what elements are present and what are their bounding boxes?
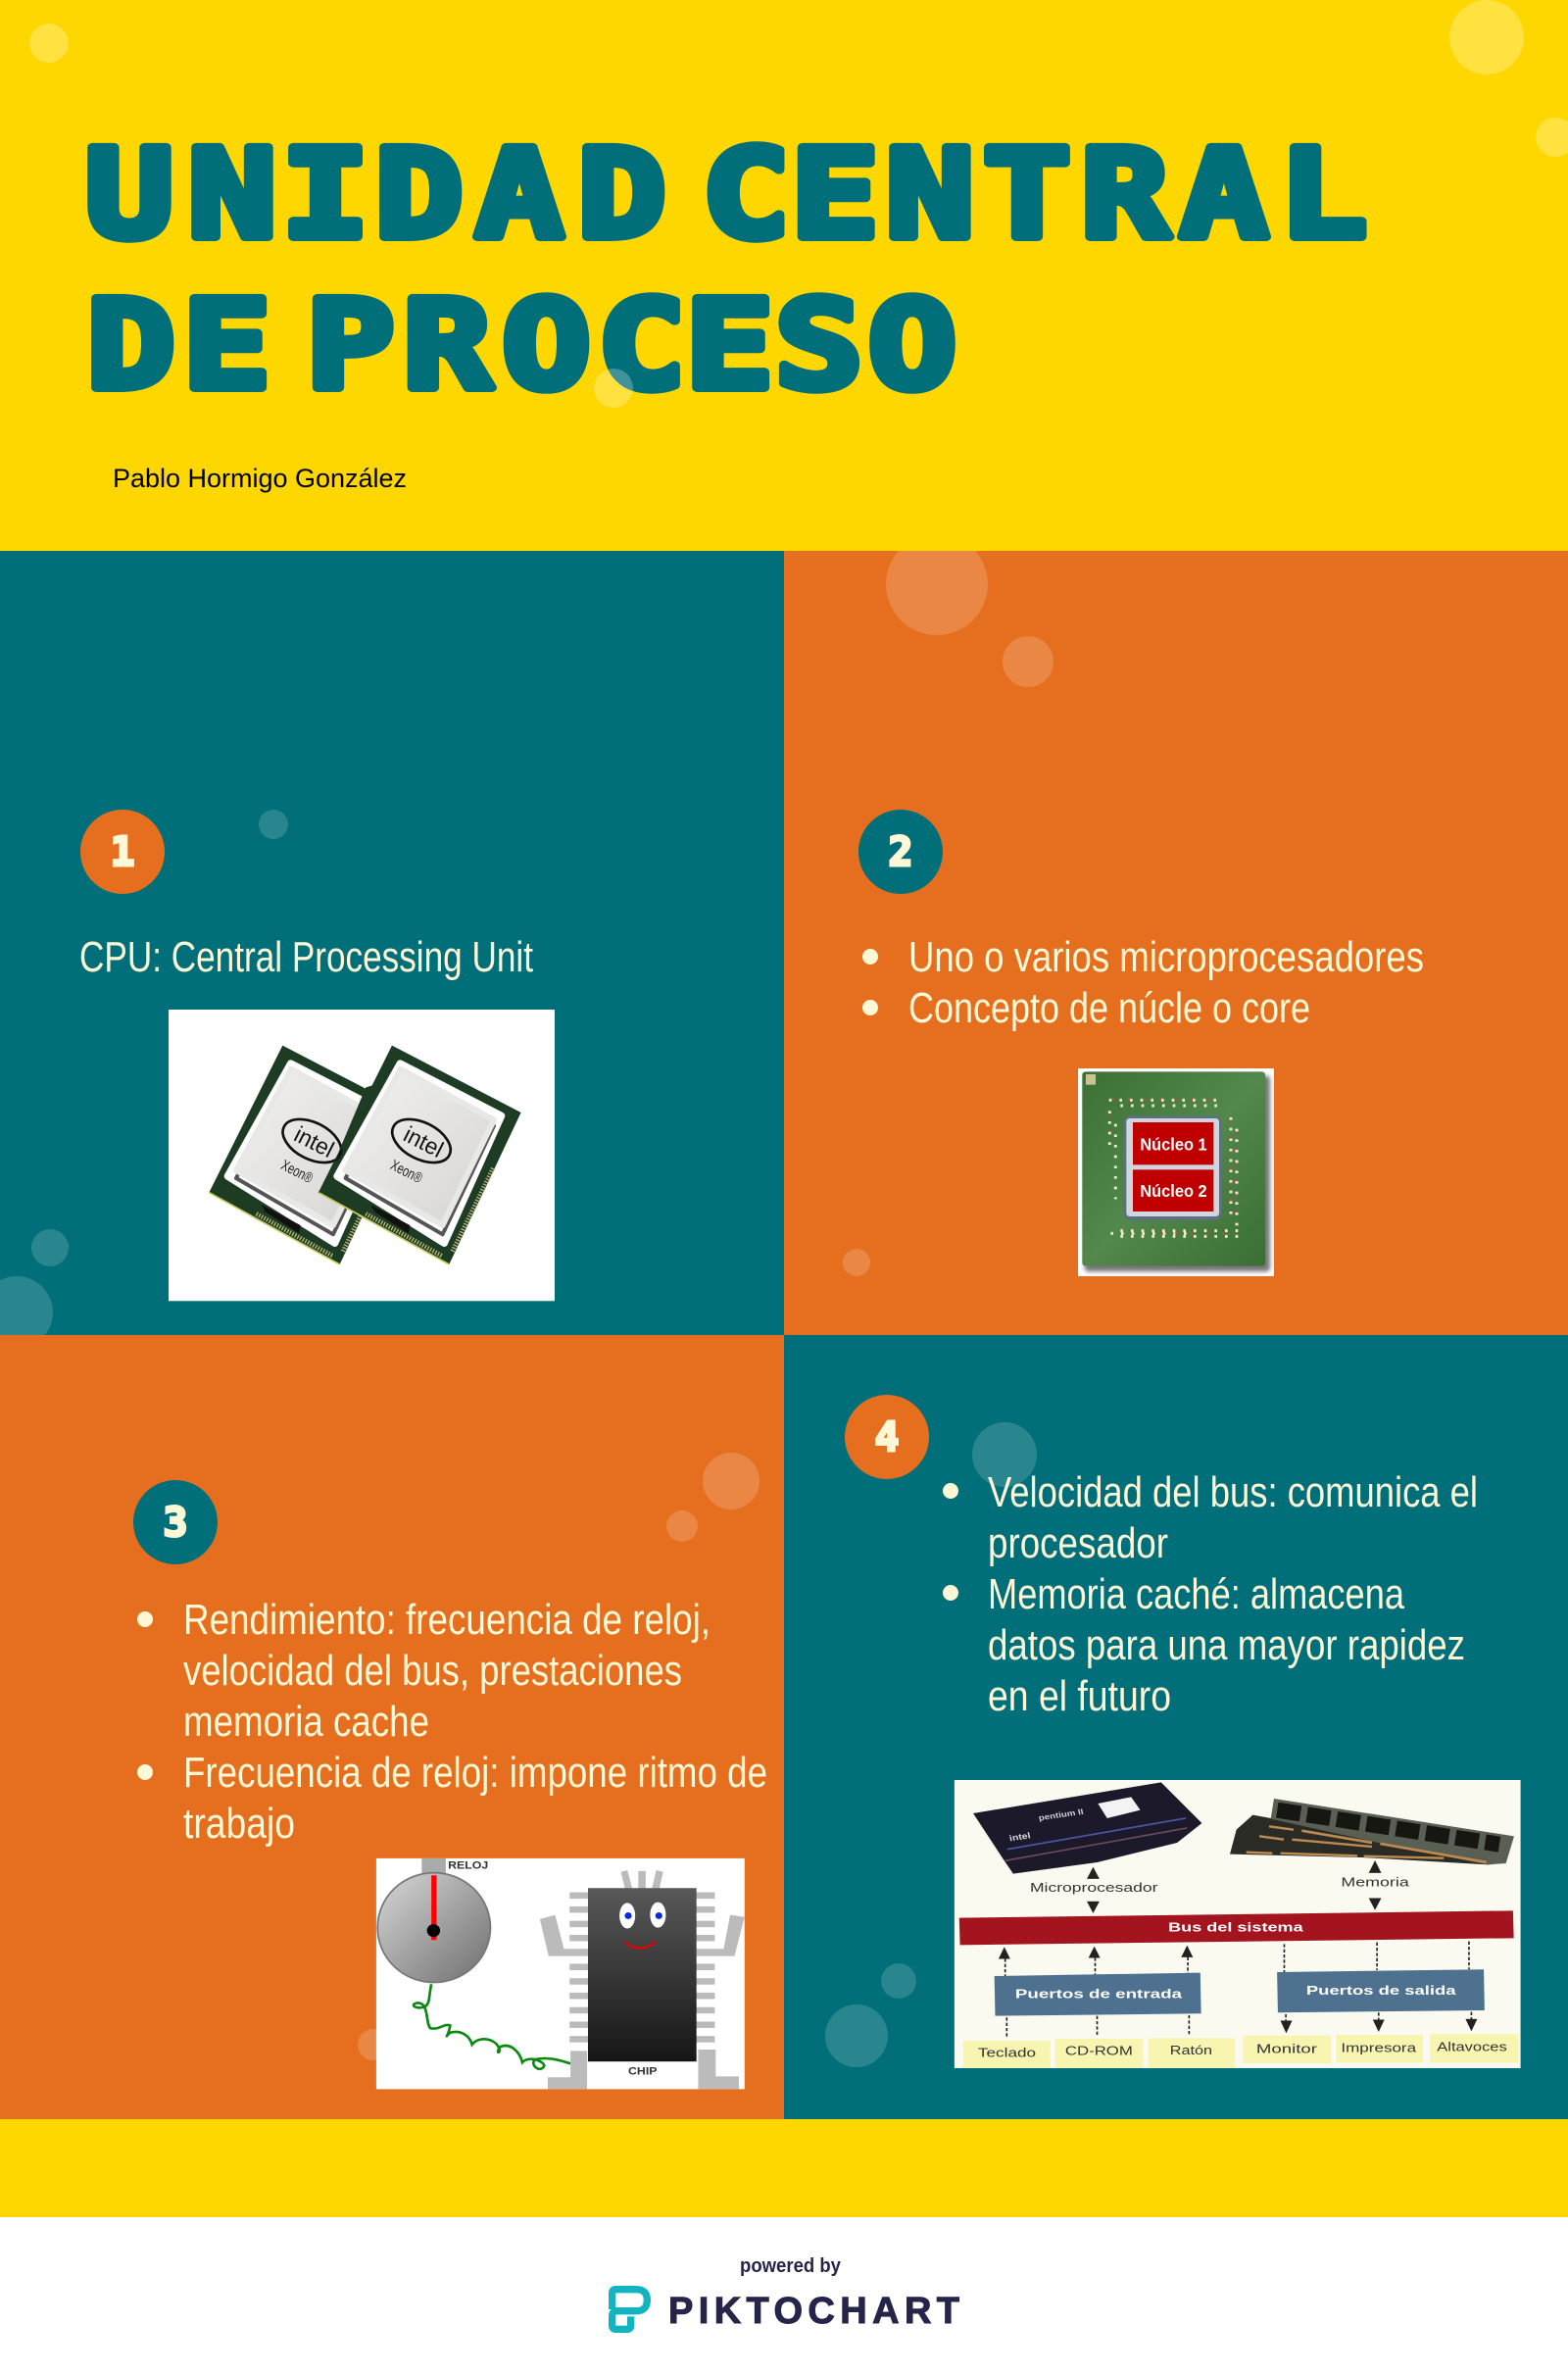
number badge 1	[80, 810, 165, 894]
peripherals: Teclado	[978, 2046, 1036, 2059]
panel 1: CPU	[0, 551, 784, 1349]
image: dual-core chip	[1078, 1068, 1274, 1276]
bullet list: bus and cache: en el futuro	[988, 1672, 1171, 1720]
text: CPU definition: CPU: Central Processing Unit	[79, 933, 533, 981]
number badge 2	[858, 810, 943, 894]
peripherals: Impresora	[1341, 2041, 1416, 2054]
title: DE PROCESO	[86, 274, 956, 417]
peripherals: Altavoces	[1437, 2040, 1507, 2053]
bullet list: bus and cache: procesador	[988, 1519, 1168, 1567]
peripherals	[963, 2034, 1519, 2068]
bullet list: bus and cache	[943, 1468, 1478, 1720]
diagram: system bus: Memoria	[1341, 1876, 1410, 1890]
input ports: Puertos de entrada	[1015, 1988, 1183, 2002]
microprocessor: intel	[1008, 1831, 1032, 1844]
number badge 2: 2	[889, 828, 912, 875]
number badge 4: 4	[875, 1413, 899, 1460]
peripherals: Ratón	[1170, 2043, 1212, 2057]
bullet list: cores: Concepto de núcle o core	[908, 984, 1310, 1032]
footer: Piktochart branding	[0, 2217, 1568, 2374]
panel 4: bus and cache	[784, 1335, 1568, 2119]
diagram: system bus	[955, 1780, 1521, 2068]
bullet list: performance: Rendimiento: frecuencia de reloj,	[183, 1596, 710, 1644]
bullet list: performance: Frecuencia de reloj: impone ritmo de	[183, 1749, 767, 1797]
diagram: system bus: Microprocesador	[1030, 1881, 1158, 1896]
output ports	[1277, 1969, 1485, 2012]
image: two Intel Xeon processors	[169, 1010, 555, 1301]
bullet list: bus and cache: datos para una mayor rapidez	[988, 1621, 1465, 1669]
peripherals: CD-ROM	[1065, 2044, 1133, 2057]
title: UNIDAD CENTRAL	[85, 124, 1367, 266]
number badge 3	[133, 1480, 218, 1564]
image: two Intel Xeon processors: intel	[400, 1121, 448, 1162]
bullet list: cores	[862, 933, 1424, 1032]
decorative bubbles: header	[29, 0, 1568, 408]
image: dual-core chip: Núcleo 1	[1140, 1134, 1207, 1154]
image: clock and chip: CHIP	[628, 2066, 658, 2078]
bullet list: bus and cache: Memoria caché: almacena	[988, 1570, 1404, 1618]
bullet list: performance	[137, 1596, 767, 1848]
footer: Piktochart branding: PIKTOCHART	[668, 2291, 959, 2332]
bullet list: performance: trabajo	[183, 1800, 295, 1848]
bullet list: performance: memoria cache	[183, 1698, 429, 1746]
microprocessor: pentium II	[1038, 1807, 1084, 1822]
input ports	[995, 1973, 1201, 2016]
bottom yellow band	[0, 2119, 1568, 2217]
image: clock and chip: RELOJ	[448, 1859, 488, 1871]
panel 3: performance	[0, 1335, 784, 2119]
number badge 3: 3	[164, 1499, 187, 1546]
author name: Pablo Hormigo González	[113, 464, 407, 493]
icon: Piktochart logo	[612, 2290, 647, 2329]
bullet list: bus and cache: Velocidad del bus: comunica el	[988, 1468, 1478, 1516]
number badge 4	[845, 1395, 929, 1479]
footer: Piktochart branding: powered by	[740, 2255, 842, 2277]
memory modules	[1230, 1799, 1514, 1864]
bus bar: Bus del sistema	[1168, 1920, 1303, 1934]
image: dual-core chip: Núcleo 2	[1140, 1181, 1207, 1201]
title	[85, 124, 1367, 417]
image: two Intel Xeon processors: intel	[290, 1121, 338, 1162]
panel 2: cores	[784, 533, 1568, 1335]
image: two Intel Xeon processors: Xeon®	[278, 1157, 316, 1187]
number badge 1: 1	[111, 828, 134, 875]
bullet list: cores: Uno o varios microprocesadores	[908, 933, 1424, 981]
bus bar	[959, 1910, 1514, 1945]
image: two Intel Xeon processors: Xeon®	[387, 1157, 425, 1187]
image: clock and chip	[376, 1858, 745, 2089]
panel: header background	[0, 0, 1568, 551]
microprocessor	[973, 1782, 1201, 1874]
peripherals: Monitor	[1256, 2042, 1317, 2055]
output ports: Puertos de salida	[1306, 1984, 1456, 1999]
bullet list: performance: velocidad del bus, prestaciones	[183, 1647, 682, 1695]
